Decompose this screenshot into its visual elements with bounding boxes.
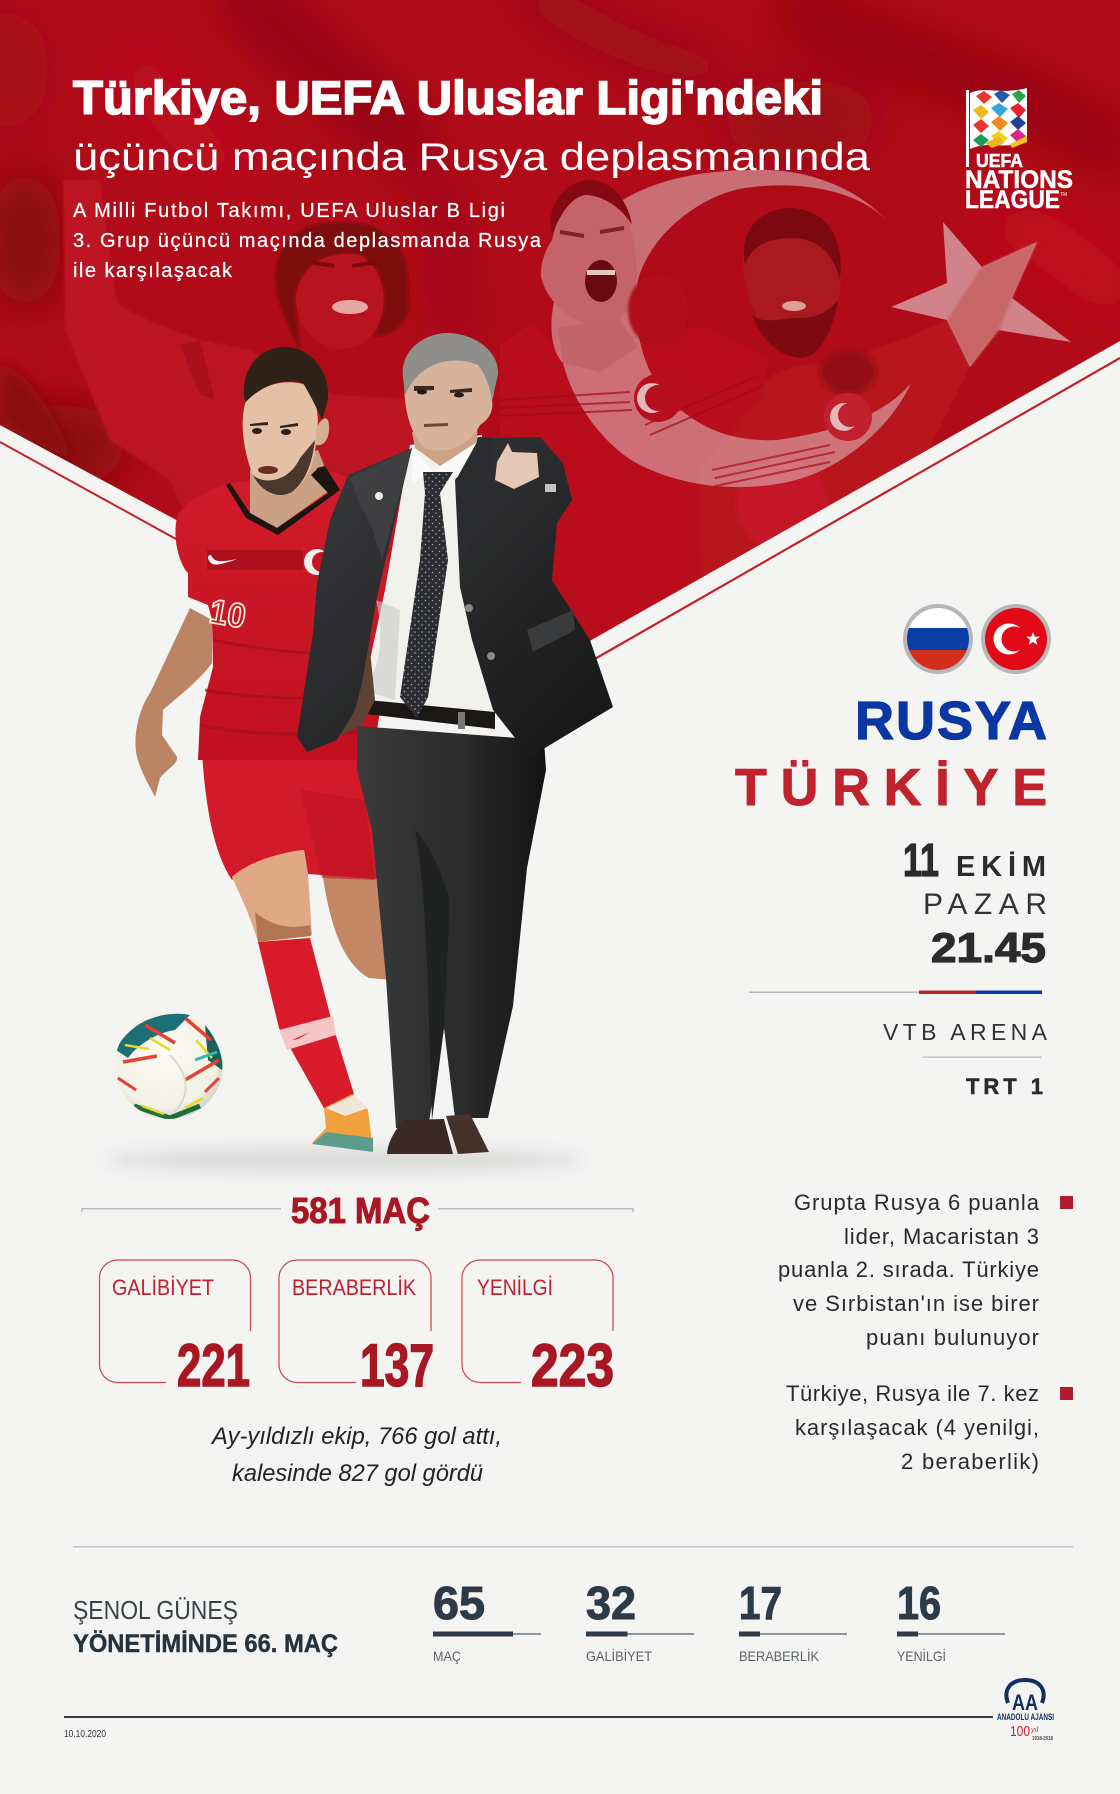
match date and time: PAZAR xyxy=(923,888,1047,921)
coach heading: ŞENOL GÜNEŞ xyxy=(73,1595,238,1625)
jacket pin and buttons xyxy=(375,492,383,500)
back leg xyxy=(322,870,392,980)
coach hand pointing xyxy=(495,443,539,489)
flag crescent xyxy=(551,170,911,487)
stat card: yenilgi: 223 xyxy=(531,1332,614,1399)
logo: UEFA Nations League: LEAGUE xyxy=(965,186,1060,214)
logo: Anadolu Ajansı: 100 xyxy=(1010,1723,1030,1740)
stat card: beraberlik: 137 xyxy=(360,1332,434,1399)
coach stat: galibiyet: 32 xyxy=(586,1577,636,1629)
head to head note xyxy=(786,1381,1039,1474)
background player: left xyxy=(0,180,414,565)
venue: VTB ARENA xyxy=(883,1019,1048,1045)
broadcaster: TRT 1 xyxy=(966,1074,1043,1099)
intro text xyxy=(73,200,542,282)
title xyxy=(73,71,870,179)
icon: Turkish flag xyxy=(981,604,1051,674)
stat card: galibiyet: GALİBİYET xyxy=(112,1275,214,1300)
background player: centre head xyxy=(541,180,688,372)
heading: 581 MAÇ: 581 MAÇ xyxy=(291,1190,430,1231)
group standing note: Grupta Rusya 6 puanla xyxy=(794,1190,1040,1215)
figure: football player xyxy=(136,347,395,1152)
stat card: beraberlik xyxy=(279,1260,434,1399)
head to head note: 2 beraberlik) xyxy=(901,1449,1039,1474)
coach collar xyxy=(412,442,477,484)
coach stat: beraberlik: BERABERLİK xyxy=(739,1647,820,1664)
jersey collar xyxy=(226,466,340,535)
logo: UEFA Nations League: NATIONS xyxy=(965,166,1073,194)
player shoe xyxy=(312,1094,373,1150)
bullet xyxy=(1060,1196,1073,1209)
bullet xyxy=(1060,1387,1073,1400)
coach heading: YÖNETİMİNDE 66. MAÇ xyxy=(73,1629,338,1658)
goals caption: Ay-yıldızlı ekip, 766 gol attı, xyxy=(210,1423,502,1450)
logo: Anadolu Ajansı: AA xyxy=(1012,1690,1038,1715)
coach stat: yenilgi xyxy=(897,1577,1005,1664)
title: üçüncü maçında Rusya deplasmanında xyxy=(73,136,870,179)
coach stat: maç: MAÇ xyxy=(433,1648,461,1664)
logo: Anadolu Ajansı: yıl xyxy=(1030,1727,1038,1734)
match date and time: 21.45 xyxy=(931,924,1046,971)
coach tie xyxy=(400,472,453,718)
intro text: ile karşılaşacak xyxy=(73,260,233,282)
head to head note: Türkiye, Rusya ile 7. kez xyxy=(786,1381,1039,1406)
date: 10.10.2020 xyxy=(64,1728,106,1740)
player arm xyxy=(136,608,212,797)
match teams xyxy=(735,691,1047,817)
logo: Anadolu Ajansı xyxy=(997,1680,1054,1742)
icon: football xyxy=(115,1011,223,1119)
match teams: TÜRKİYE xyxy=(735,759,1047,817)
group standing note: puanla 2. sırada. Türkiye xyxy=(778,1257,1039,1282)
match date and time: 11 xyxy=(903,834,939,886)
coach shirt xyxy=(360,435,500,715)
figure: coach xyxy=(297,333,613,1154)
intro text: 3. Grup üçüncü maçında deplasmanda Rusya xyxy=(73,230,542,252)
background player: right xyxy=(658,208,968,602)
logo: UEFA Nations League xyxy=(965,88,1073,214)
coach hand in pocket xyxy=(335,630,375,738)
shadow under figures xyxy=(105,1149,585,1171)
logo: Anadolu Ajansı: ANADOLU AJANSI xyxy=(997,1712,1054,1722)
stat card: yenilgi xyxy=(462,1260,614,1399)
coach stat: yenilgi: YENİLGİ xyxy=(897,1647,946,1664)
tricolour divider xyxy=(749,990,1042,994)
coach stat: maç: 65 xyxy=(433,1577,485,1629)
match date and time xyxy=(903,834,1047,971)
jersey crest xyxy=(304,549,330,575)
accent line: right diagonal xyxy=(593,358,1120,660)
title: Türkiye, UEFA Uluslar Ligi'ndeki xyxy=(73,71,823,124)
coach stat: galibiyet xyxy=(586,1577,694,1664)
player neck xyxy=(250,450,333,528)
stat card: yenilgi: YENİLGİ xyxy=(477,1275,553,1300)
match date and time: EKİM xyxy=(956,851,1046,883)
player sock xyxy=(258,938,354,1110)
coach jacket xyxy=(297,437,613,757)
coach stat: galibiyet: GALİBİYET xyxy=(586,1647,652,1664)
coach neck xyxy=(412,415,478,466)
coach stat: beraberlik: 17 xyxy=(739,1577,782,1629)
coach belt xyxy=(366,700,495,729)
group standing note: puanı bulunuyor xyxy=(866,1325,1039,1350)
group standing note xyxy=(778,1190,1040,1350)
stat card: galibiyet xyxy=(100,1260,250,1399)
goals caption: kalesinde 827 gol gördü xyxy=(232,1460,483,1487)
coach shoes xyxy=(387,1119,453,1154)
goals caption xyxy=(210,1423,502,1487)
coach stat: yenilgi: 16 xyxy=(897,1577,941,1629)
icon: Russian flag xyxy=(903,604,973,674)
logo: Anadolu Ajansı: 1918-2018 xyxy=(1032,1736,1053,1742)
logo: UEFA Nations League: TM xyxy=(1060,192,1067,198)
coach head xyxy=(404,355,494,451)
coach stat: maç xyxy=(433,1577,541,1664)
jersey swoosh xyxy=(208,555,237,565)
background player: centre body xyxy=(500,323,769,660)
stat card: galibiyet: 221 xyxy=(177,1332,250,1399)
raised arm over star xyxy=(947,242,1037,367)
heading: 581 MAÇ xyxy=(82,1190,633,1231)
match teams: RUSYA xyxy=(855,691,1047,751)
coach trousers xyxy=(357,726,546,1128)
flag star xyxy=(891,222,1071,367)
player shorts xyxy=(202,745,388,880)
player jersey xyxy=(175,472,395,760)
intro text: A Milli Futbol Takımı, UEFA Uluslar B Ligi xyxy=(73,200,505,222)
logo: UEFA Nations League: UEFA xyxy=(976,151,1023,171)
panel: red header with flag and players xyxy=(0,0,1120,700)
coach stat: beraberlik xyxy=(739,1577,847,1664)
background jersey details xyxy=(500,374,872,486)
accent line: left diagonal xyxy=(0,442,176,539)
player thigh xyxy=(232,850,312,942)
player head xyxy=(243,382,318,495)
head to head note: karşılaşacak (4 yenilgi, xyxy=(795,1415,1039,1440)
stat card: beraberlik: BERABERLİK xyxy=(292,1275,416,1300)
jersey number: 10 xyxy=(207,592,249,636)
coach heading xyxy=(73,1595,338,1658)
group standing note: ve Sırbistan'ın ise birer xyxy=(793,1291,1039,1316)
group standing note: lider, Macaristan 3 xyxy=(844,1224,1039,1249)
